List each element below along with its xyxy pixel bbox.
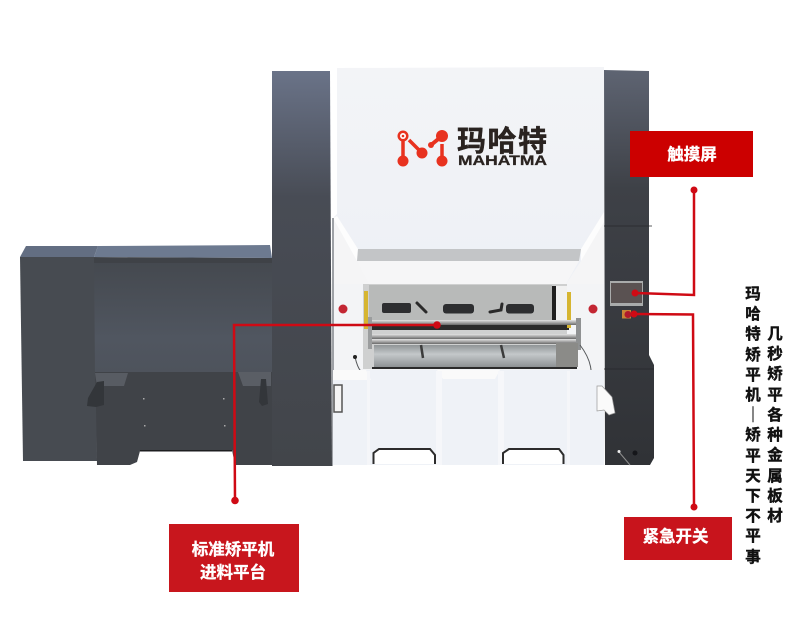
label: touch screen [630, 131, 753, 177]
label: standard leveler feeding platform: 进料平台 [200, 562, 266, 582]
grey band under top housing [357, 249, 581, 261]
logo latin name: MAHATMA [458, 153, 547, 168]
cabinet lower panel with cut-out [95, 372, 273, 465]
bottom connectors [618, 450, 638, 465]
callout line: touch screen [632, 186, 698, 296]
cabinet middle box [94, 245, 273, 373]
machine: main white body [272, 67, 604, 472]
machine: side feeding cabinet [20, 245, 273, 465]
red indicator buttons [338, 304, 598, 314]
left body handle [334, 385, 342, 412]
windows [382, 303, 534, 314]
emergency stop switch [622, 310, 632, 318]
housing chamfer shading [332, 212, 604, 466]
right dark column [604, 70, 654, 465]
cabinet left box [20, 246, 98, 461]
logo mark [398, 130, 448, 166]
yellow safety strips [364, 291, 571, 329]
left dark column [272, 71, 332, 466]
label: standard leveler feeding platform: 标准矫平机 [192, 540, 275, 559]
door handles [417, 303, 502, 312]
lower body panels [333, 370, 604, 472]
steel bars [368, 317, 581, 350]
label: emergency switch [624, 517, 732, 560]
vertical slogan: column one: 玛哈特矫平机｜矫平天下不平事 [745, 285, 761, 566]
callout line: emergency switch [630, 310, 698, 510]
vertical slogan: column two: 几秒矫平各种金属板材 [767, 326, 783, 525]
lower roller [374, 345, 556, 368]
label: emergency switch: 紧急开关 [642, 526, 709, 546]
callout line: feeding platform [231, 321, 441, 504]
cabinet handles [87, 379, 268, 407]
label: touch screen: 触摸屏 [667, 145, 717, 164]
right white handle [597, 386, 615, 415]
touch screen [610, 281, 643, 306]
cut-outs [374, 449, 564, 464]
leveling opening [353, 284, 591, 389]
logo [398, 125, 549, 168]
label: standard leveler feeding platform [169, 524, 299, 592]
logo chinese name: 玛哈特 [457, 125, 549, 158]
